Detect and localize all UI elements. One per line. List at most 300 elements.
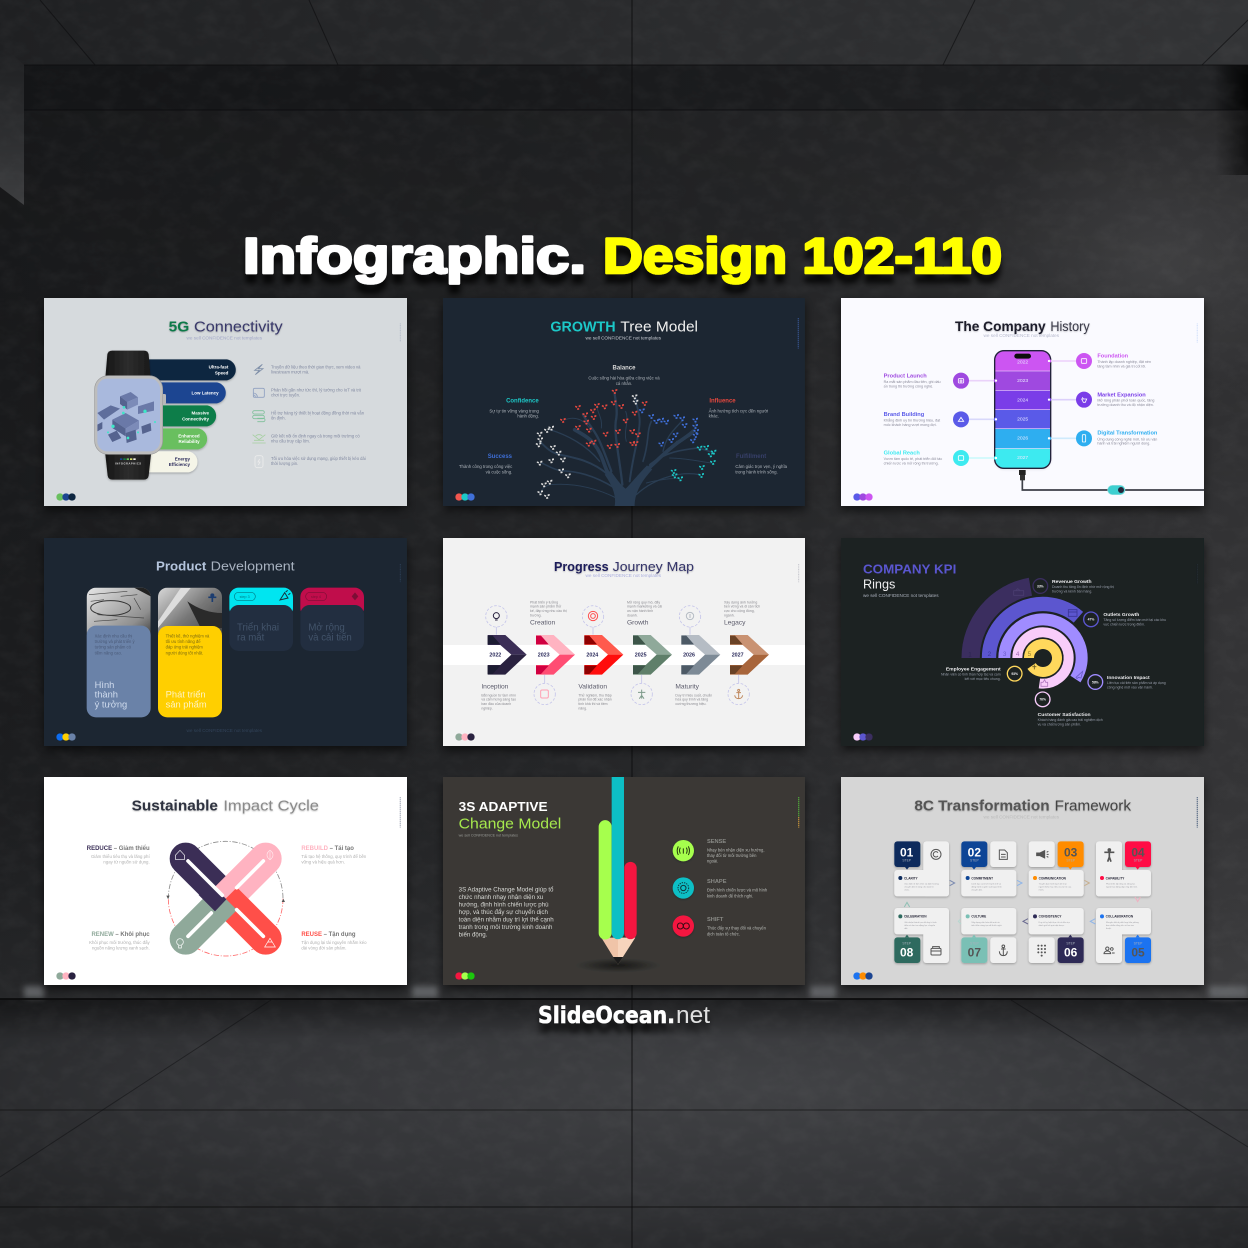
stage descriptions: Duy trì hiệu suất, chuẩn: [675, 693, 712, 697]
body text: 3S Adaptive Change Model giúp tổ: [459, 887, 554, 894]
feature bar labels: Low Latency: [191, 390, 219, 395]
model descriptions: [707, 839, 768, 936]
feature descriptions: chơi trực tuyến.: [271, 392, 300, 397]
phone year labels: 2023: [1017, 378, 1028, 384]
chevron 2022: [488, 635, 527, 675]
card descriptions: tinh thần sáng tạo để thích nghi.: [971, 924, 1002, 927]
feature descriptions: livestream mượt mà.: [271, 370, 309, 375]
feature bar labels: Energy: [175, 456, 191, 461]
isometric illustration on watch screen: [97, 392, 156, 443]
feature bar labels: Speed: [215, 371, 229, 376]
tree labels: khác.: [709, 414, 719, 419]
quadrant texts: Giảm thiểu tiêu thụ và lãng phí: [91, 854, 150, 859]
ring numbers: 4: [1016, 651, 1020, 658]
quadrant texts: Tái tạo hệ thống, quy trình để bền: [301, 854, 367, 859]
card descriptions: thuật.: [1106, 927, 1112, 930]
stage descriptions: hóa quy trình và tăng: [675, 698, 708, 702]
card descriptions: Khuyến khích phối hợp liên phòng: [1106, 921, 1140, 924]
stage descriptions: Bắt nguồn từ tầm nhìn: [481, 692, 516, 697]
card headings: [904, 876, 1134, 919]
tree labels: Success: [488, 454, 513, 460]
side tag: [796, 318, 800, 349]
timeline band: [443, 645, 805, 665]
card headings: COLLABORATION: [1106, 915, 1134, 919]
footer dots: [455, 972, 475, 980]
card 1: Hình thành ý tưởng: trường và phát triển ý: [95, 639, 136, 644]
model descriptions: thay đổi từ môi trường bên: [707, 853, 757, 858]
side tag: [399, 564, 402, 583]
phone year labels: 2026: [1017, 436, 1028, 442]
panel: Growth Tree Model: [443, 298, 805, 506]
feature descriptions: Hỗ trợ hàng tỷ thiết bị hoạt động đồng thời mà vẫn: [271, 410, 365, 415]
card descriptions: Ghi nhận thành tựu để duy trì tinh: [904, 921, 937, 924]
STEP labels: [902, 859, 1143, 946]
card descriptions: mình.: [1039, 890, 1044, 892]
stage labels: Creation: [530, 620, 555, 627]
heading: Impact Cycle: [223, 798, 319, 814]
stage descriptions: doanh.: [627, 613, 638, 617]
tree labels: Sự tự tin vững vàng trong: [489, 408, 540, 413]
stage descriptions: cực cho cộng đồng,: [724, 609, 755, 613]
STEP labels: STEP: [1134, 859, 1143, 863]
quadrant texts: REUSE – Tận dụng: [301, 932, 356, 938]
body text: hợp, và thúc đẩy sự chuyển dịch: [459, 909, 549, 916]
quadrant texts: nguồn năng lượng xanh sạch.: [92, 946, 150, 951]
heading second line: Change Model: [459, 816, 561, 832]
panel: 3S Adaptive Change Model: [443, 777, 805, 985]
feature bar labels: Connectivity: [182, 416, 209, 421]
phone year labels: 2024: [1017, 397, 1028, 403]
heading: [550, 319, 698, 335]
strap logo text: INFOGRAPHICS: [115, 461, 142, 465]
KPI descriptions: vụ và chất lượng sản phẩm.: [1038, 722, 1081, 726]
card headings: CAPABILITY: [1106, 876, 1125, 880]
percentage badges: [1007, 579, 1103, 707]
feature bar labels: Enhanced: [178, 433, 200, 438]
card 2: Phát triển sản phẩm: tối ưu tính năng để: [166, 639, 201, 644]
step icons: [931, 849, 1115, 957]
body text: biến động.: [459, 931, 488, 938]
STEP labels: STEP: [902, 942, 912, 946]
heading: Development: [211, 560, 295, 574]
card 2: Phát triển sản phẩm: Phát triển: [166, 690, 206, 700]
heading: GROWTH: [550, 319, 616, 335]
heading: Framework: [1055, 798, 1132, 814]
quadrant texts: [87, 845, 367, 951]
tree labels: hành động.: [517, 414, 539, 419]
year labels: 2025: [635, 653, 647, 659]
percentage values: [1011, 584, 1099, 702]
model descriptions: SHAPE: [707, 879, 727, 885]
card descriptions: chuyển đổi.: [971, 889, 983, 892]
card 2: Phát triển sản phẩm: sản phẩm: [166, 699, 207, 709]
side tag: [1195, 797, 1199, 828]
model descriptions: SENSE: [707, 839, 726, 845]
phone year labels: 2027: [1017, 455, 1028, 461]
footer dots: [455, 733, 475, 741]
subtitle: we sell CONFIDENCE not templates: [586, 336, 662, 341]
stage descriptions: Xây dựng ảnh hưởng: [724, 600, 757, 604]
model descriptions: Định hình chiến lược và mô hình: [707, 888, 768, 893]
ring icons: [493, 611, 743, 699]
quadrant texts: dài vòng đời sản phẩm.: [301, 946, 347, 951]
year labels: 2027: [732, 653, 744, 659]
heading: [554, 559, 694, 574]
heading: Tree Model: [620, 319, 698, 335]
stage descriptions: Mở rộng quy mô, đẩy: [627, 600, 660, 604]
chevron 2027: [730, 635, 769, 675]
blue leaves: [639, 408, 699, 447]
tagline: we sell CONFIDENCE not templates: [187, 728, 263, 733]
chevrons: [488, 635, 769, 675]
feature icons: [252, 364, 266, 468]
card 2: Phát triển sản phẩm: Thiết kế, thử nghiệm và: [166, 633, 210, 638]
panel: 8C Transformation Framework: [841, 777, 1204, 985]
heading: COMPANY KPI: [863, 562, 956, 576]
card 4: Mở rộng và cải tiến: step 4: [311, 595, 321, 599]
feature descriptions: Tối ưu hóa việc sử dụng mạng, giúp thiết bị kéo dài: [271, 456, 366, 461]
card 1: Hình thành ý tưởng: tiềm năng cao.: [95, 650, 122, 655]
timeline texts: hành và trải nghiệm người dùng.: [1097, 442, 1150, 446]
card headings: CLARITY: [904, 876, 919, 880]
icon circles: [673, 840, 694, 937]
footer dots: [455, 493, 475, 501]
KPI descriptions: Innovation Impact: [1107, 675, 1150, 681]
stage descriptions: trường.: [530, 613, 542, 617]
card descriptions: Xây dựng văn hóa đổi mới và: [971, 921, 1000, 924]
capsule slits: [188, 861, 263, 936]
card descriptions: Lãnh đạo cam kết mạnh mẽ và: [971, 883, 1002, 886]
side tag: [797, 564, 800, 583]
card 1: Hình thành ý tưởng: tưởng sản phẩm có: [95, 645, 132, 650]
KPI descriptions: trường và kênh bán hàng.: [1052, 589, 1092, 593]
percentage values: 76%: [1039, 698, 1046, 702]
heading: The Company: [955, 319, 1046, 334]
card descriptions: [904, 883, 1140, 930]
card 2: Phát triển sản phẩm: [158, 588, 222, 717]
feature bar labels: Reliability: [178, 439, 200, 444]
year labels: [489, 653, 744, 659]
timeline texts: Vươn tầm quốc tế, phát triển đối tác: [884, 457, 942, 461]
subtitle: we sell CONFIDENCE not templates: [984, 815, 1060, 820]
icon glyphs: [677, 846, 689, 929]
crossed capsules: [178, 851, 274, 947]
timeline texts: [884, 353, 1158, 465]
tree labels: trong hành trình sống.: [735, 469, 778, 474]
card descriptions: đánh giá kết quả đạt được.: [1039, 924, 1065, 927]
model descriptions: Nhạy bén nhận diện xu hướng,: [707, 848, 765, 853]
step numbers: 03: [1064, 845, 1078, 859]
card descriptions: đồng hành xuyên suốt quá trình: [971, 886, 1002, 889]
KPI descriptions: Employee Engagement: [946, 667, 1001, 673]
stage descriptions: bền vững và di sản tích: [724, 605, 760, 609]
KPI descriptions: Tăng số lượng điểm bán mới tại các khu: [1103, 618, 1166, 622]
ring numbers: 1: [968, 651, 972, 658]
panel: Progress Journey Map: [443, 538, 805, 746]
model descriptions: SHIFT: [707, 917, 724, 923]
percentage values: 58%: [1092, 680, 1099, 684]
stage descriptions: ban đầu của doanh: [481, 702, 511, 706]
body text: [459, 887, 554, 938]
card 4: Mở rộng và cải tiến: Mở rộng: [308, 623, 345, 634]
panel: 5G Connectivity: [44, 298, 407, 506]
subtitle: we sell CONFIDENCE not templates: [586, 573, 662, 578]
card descriptions: người hiểu mục tiêu và vai trò của: [1039, 886, 1072, 889]
tree labels: Fulfillment: [736, 454, 766, 460]
footer dots: [56, 972, 76, 980]
percentage values: 33%: [1037, 584, 1044, 588]
footer dots: [853, 972, 873, 980]
heading: 5G: [169, 319, 189, 335]
number tiles: [894, 841, 1151, 963]
card 1: Hình thành ý tưởng: Hình: [95, 680, 114, 690]
feature bar labels: [169, 365, 229, 467]
body text: tranh trong môi trường kinh doanh: [459, 924, 553, 931]
year labels: 2023: [538, 653, 550, 659]
timeline texts: Brand Building: [884, 412, 925, 418]
card descriptions: ban nhằm tăng tốc và lan tỏa: [1106, 924, 1135, 927]
side tag: [797, 797, 801, 828]
card 3: Triển khai ra mắt: ra mắt: [237, 632, 265, 643]
KPI descriptions: Nhân viên có tinh thần hợp tác và cam: [941, 673, 1001, 677]
subtitle: we sell CONFIDENCE not templates: [459, 834, 518, 838]
card headings: COMMUNICATION: [1039, 876, 1067, 880]
heading second line: Rings: [863, 578, 895, 592]
tree labels: Cảm giác trọn vẹn, ý nghĩa: [735, 464, 788, 469]
step numbers: 06: [1064, 945, 1078, 959]
stage descriptions: phản hồi để xác nhận: [578, 698, 612, 702]
phone year labels: 2025: [1017, 416, 1028, 422]
timeline texts: Foundation: [1097, 353, 1129, 359]
stage labels: Inception: [481, 684, 509, 691]
ring connectors: [496, 627, 739, 683]
timeline texts: Product Launch: [884, 373, 927, 379]
footer dots: [56, 733, 76, 741]
smartwatch: [95, 351, 166, 480]
KPI descriptions: [941, 579, 1166, 726]
heading: Journey Map: [613, 559, 694, 574]
dashed icon rings: [486, 606, 749, 705]
timeline texts: mốc khách hàng vượt mong đợi.: [884, 423, 937, 427]
timeline texts: ấn trong thị trường công nghệ.: [884, 384, 933, 388]
stage labels: Legacy: [724, 620, 746, 627]
timeline texts: Ứng dụng công nghệ mới, tối ưu vận: [1097, 436, 1157, 441]
STEP labels: STEP: [1134, 942, 1143, 946]
site name: [538, 1002, 710, 1029]
card headings: CELEBRATION: [904, 915, 927, 919]
timeline texts: Global Reach: [884, 450, 920, 456]
footer dots: [56, 493, 76, 501]
step numbers: 02: [968, 845, 981, 859]
quadrant texts: vững và hiệu quả hơn.: [301, 860, 345, 865]
stage descriptions: và cảm hứng sáng tạo: [481, 698, 516, 702]
card headings: CONSISTENCY: [1039, 915, 1062, 919]
card heading dots: [898, 876, 1104, 918]
body text: chức nhanh nhạy nhận diện xu: [459, 894, 544, 901]
ring numbers: 3: [1003, 651, 1007, 658]
quadrant texts: Tận dụng lại tài nguyên nhằm kéo: [301, 940, 367, 945]
STEP labels: STEP: [1066, 942, 1076, 946]
stage descriptions: ưu vận hành tinh: [627, 609, 653, 613]
feature bar labels: Efficiency: [169, 462, 191, 467]
card descriptions: Xác định rõ tầm nhìn và định hướng: [904, 883, 940, 886]
tree labels: Thành công trong công việc: [459, 464, 513, 469]
feature descriptions: thời lượng pin.: [271, 461, 298, 466]
timeline connectors: [969, 361, 1076, 458]
KPI descriptions: Doanh thu tăng ổn định nhờ mở rộng thị: [1052, 585, 1114, 589]
charging cable: [1019, 470, 1204, 495]
card 3: Triển khai ra mắt: [229, 588, 293, 651]
KPI descriptions: Customer Satisfaction: [1038, 712, 1091, 718]
quadrant texts: RENEW – Khôi phục: [91, 932, 150, 938]
feature bar labels: Ultra-fast: [209, 365, 229, 370]
card 2: Phát triển sản phẩm: người dùng tốt nhất.: [166, 650, 203, 655]
step cards surfaces: [894, 841, 1151, 963]
panel: The Company History: [841, 298, 1204, 506]
quadrant texts: Khôi phục môi trường, thúc đẩy: [89, 940, 150, 945]
stage labels: Growth: [627, 620, 649, 627]
card descriptions: Duy trì kỷ luật thực thi và liên tục: [1039, 921, 1071, 924]
quadrant texts: ngay từ nguồn sử dụng.: [103, 860, 150, 865]
card 4: Mở rộng và cải tiến: [300, 588, 364, 651]
pencil: [575, 777, 661, 973]
timeline nodes: [953, 353, 1092, 466]
card descriptions: đổi.: [904, 927, 908, 930]
phone: [994, 350, 1051, 469]
white leaves: [536, 394, 638, 499]
chevron 2025: [633, 635, 672, 675]
step numbers: 07: [968, 945, 981, 959]
heading: 3S ADAPTIVE: [459, 800, 548, 814]
stage descriptions: ngành.: [724, 613, 735, 617]
KPI descriptions: Revenue Growth: [1052, 579, 1092, 585]
stage descriptions: [481, 600, 760, 710]
card 3: Triển khai ra mắt: Triển khai: [237, 623, 279, 634]
title: Design 102-110: Design 102-110: [603, 228, 1002, 284]
dashed cycle ring: [168, 841, 283, 956]
timeline texts: Thành lập doanh nghiệp, đặt nền: [1097, 360, 1151, 364]
card 1: Hình thành ý tưởng: Xác định nhu cầu thị: [95, 633, 132, 638]
footer dots: [853, 733, 873, 741]
feature bars: [144, 359, 236, 472]
stage descriptions: kế, đáp ứng nhu cầu thị: [530, 609, 567, 613]
stage descriptions: cường thương hiệu.: [675, 702, 706, 706]
tree labels: Confidence: [506, 398, 539, 404]
feature descriptions: [271, 365, 366, 466]
timeline texts: tảng tầm nhìn và giá trị cốt lõi.: [1097, 364, 1146, 368]
feature descriptions: nhu cầu truy cập lớn.: [271, 438, 310, 443]
heading: [955, 319, 1090, 334]
timeline texts: Mở rộng phân phối toàn quốc, tăng: [1097, 399, 1154, 403]
model descriptions: dịch toàn tổ chức.: [707, 931, 740, 936]
panel: Product Development: [44, 538, 407, 746]
side tag: [399, 323, 402, 342]
panel: Company KPI Rings: [841, 538, 1204, 746]
chevron 2023: [536, 635, 575, 675]
stage descriptions: năng.: [578, 706, 587, 710]
tree labels: cá nhân.: [616, 381, 632, 386]
tree labels: Cuộc sống hài hòa giữa công việc và: [588, 376, 660, 381]
side tag: [1195, 323, 1199, 343]
timeline texts: trưởng doanh thu và độ nhận diện.: [1097, 403, 1154, 407]
ring numbers: 5: [1028, 651, 1032, 658]
stage labels: [481, 620, 746, 691]
body text: toàn diện nhằm duy trì lợi thế cạnh: [459, 917, 554, 924]
feature bar labels: Massive: [192, 410, 210, 415]
concentric KPI rings: [971, 587, 1082, 684]
ring arrowheads: [166, 896, 285, 902]
timeline texts: Ra mắt sản phẩm đầu tiên, ghi dấu: [884, 379, 941, 384]
site name light: net: [676, 1002, 710, 1029]
year labels: 2026: [683, 653, 695, 659]
card 2: Phát triển sản phẩm: đáp ứng trải nghiệm: [166, 645, 203, 650]
tree labels: Ảnh hưởng tích cực đến người: [709, 408, 768, 413]
timeline texts: Digital Transformation: [1097, 431, 1158, 437]
site name bold: SlideOcean.: [538, 1003, 675, 1029]
subtitle: we sell CONFIDENCE not templates: [187, 336, 263, 341]
subtitle: we sell CONFIDENCE not templates: [984, 333, 1060, 338]
feature descriptions: ổn định.: [271, 415, 286, 420]
percentage values: 47%: [1088, 618, 1094, 622]
model descriptions: Thúc đẩy sự thay đổi và chuyển: [707, 926, 767, 931]
timeline texts: chiến lược và mở rộng thị trường.: [884, 461, 939, 465]
stage labels: Maturity: [675, 684, 700, 691]
KPI descriptions: Outlets Growth: [1103, 612, 1139, 618]
feature descriptions: Giữ kết nối ổn định ngay cả trong môi trường có: [271, 433, 360, 438]
ring numbers: [968, 651, 1032, 658]
dark capsule overlap: [199, 883, 226, 911]
timeline texts: Khẳng định uy tín thương hiệu, đạt: [884, 418, 940, 423]
step numbers: [900, 845, 1145, 959]
step numbers: 01: [900, 845, 914, 859]
KPI descriptions: Khách hàng đánh giá cao trải nghiệm dịch: [1038, 718, 1103, 722]
step numbers: 04: [1131, 845, 1145, 859]
STEP labels: STEP: [970, 859, 979, 863]
side tag: [398, 797, 402, 828]
subtitle: we sell CONFIDENCE not templates: [863, 593, 939, 598]
card 1: Hình thành ý tưởng: [87, 588, 151, 717]
card descriptions: thần và lan tỏa động lực chuyển: [904, 924, 936, 927]
year labels: 2024: [586, 653, 598, 659]
card 3: Triển khai ra mắt: step 3: [240, 595, 250, 599]
heading: History: [1050, 319, 1090, 334]
ring icons: [1014, 589, 1083, 686]
quadrant texts: REDUCE – Giảm thiểu: [87, 845, 150, 852]
STEP labels: STEP: [902, 859, 912, 863]
card 1: Hình thành ý tưởng: thành: [95, 690, 118, 700]
heading: [132, 798, 319, 814]
side tag: [1196, 564, 1198, 583]
card 1: Hình thành ý tưởng: ý tưởng: [95, 699, 127, 709]
percentage values: 93%: [1011, 672, 1018, 676]
tree labels: [459, 365, 788, 474]
footer dots: [853, 493, 873, 501]
tree: [540, 393, 714, 506]
STEP labels: STEP: [1066, 859, 1076, 863]
feature descriptions: Phản hồi gần như tức thì, lý tưởng cho IoT và trò: [271, 387, 362, 392]
card headings: CULTURE: [971, 915, 986, 919]
chevron 2024: [584, 635, 623, 675]
body text: hướng, định hình chiến lược phù: [459, 902, 549, 909]
heading: Progress: [554, 559, 609, 574]
heading: [914, 798, 1132, 814]
tile pointers: [905, 867, 1140, 937]
flow arrows: [904, 880, 1140, 924]
heading: [156, 560, 295, 574]
card descriptions: người lao động đáp ứng đổi mới.: [1106, 886, 1138, 889]
feature descriptions: Truyền dữ liệu theo thời gian thực, xem video và: [271, 365, 361, 370]
KPI descriptions: kết với mục tiêu chung.: [965, 677, 1001, 681]
